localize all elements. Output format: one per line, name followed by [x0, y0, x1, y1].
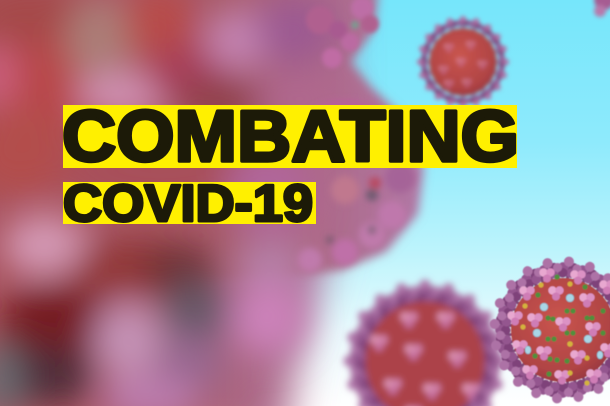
headline bar: COVID-19: COVID-19 [63, 175, 313, 233]
headline [62, 97, 519, 233]
surface proteins [507, 268, 610, 386]
virus: lower centre blurred [338, 274, 512, 406]
headline bar: COMBATING: COMBATING [62, 97, 519, 177]
blurred virus top centre [306, 0, 379, 68]
virus: sharp lower right [482, 249, 610, 406]
spikes [482, 249, 610, 406]
virus: upper right blurred [417, 16, 509, 108]
virus: corner fragment [594, 0, 610, 17]
virus body [511, 278, 610, 382]
blurred virus behind headline [298, 100, 415, 272]
blurred foreground virus mass [0, 0, 424, 406]
